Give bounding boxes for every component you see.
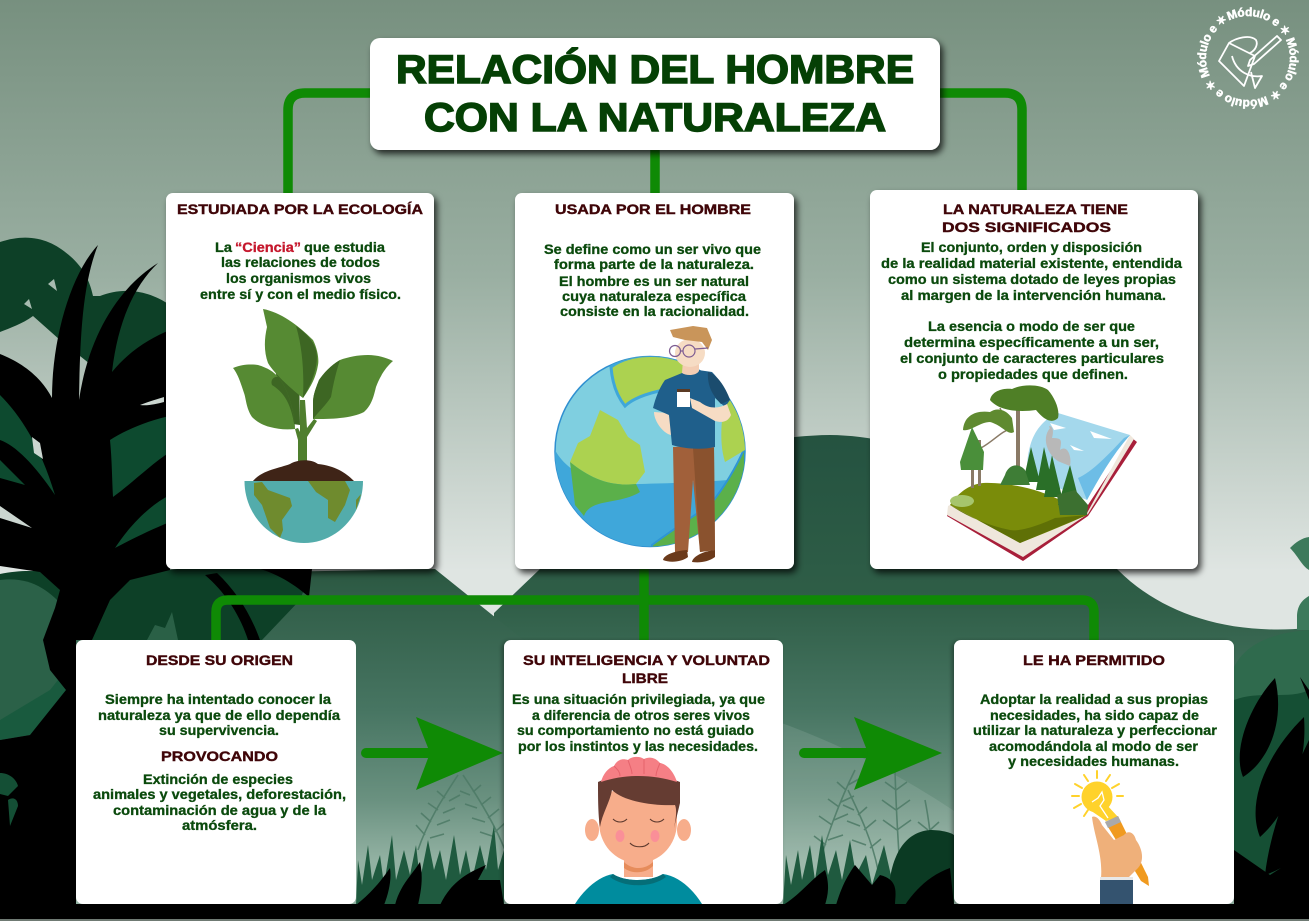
body text: Siempre ha intentado conocer la	[105, 692, 332, 707]
heading: LE HA PERMITIDO	[1023, 652, 1165, 668]
heading	[942, 201, 1128, 235]
icon: open book with forest	[947, 385, 1137, 561]
body text: acomodándola al modo de ser	[989, 739, 1199, 754]
title: CON LA NATURALEZA	[424, 96, 886, 140]
icon: earth globe	[554, 356, 746, 548]
icon: plant on half globe	[233, 309, 393, 543]
body text: necesidades, ha sido capaz de	[990, 708, 1199, 723]
body text: Se define como un ser vivo que	[544, 242, 761, 257]
heading: DOS SIGNIFICADOS	[942, 219, 1111, 235]
body text: “Ciencia”	[235, 240, 301, 255]
body text: su supervivencia.	[159, 723, 279, 738]
body text	[200, 240, 401, 302]
body text: el conjunto de caracteres particulares	[900, 351, 1164, 366]
logo: Módulo e: Módulo e ✶ Módulo e ✶ Módulo e ✶ Módulo e ✶	[1197, 7, 1299, 109]
panel: su inteligencia y voluntad libre	[504, 640, 783, 904]
body text: consequences: Extinción de especies	[143, 772, 293, 787]
heading: LIBRE	[622, 670, 668, 686]
title box	[370, 38, 940, 150]
body text: consequences	[93, 772, 346, 833]
body text: El hombre es un ser natural	[559, 274, 749, 289]
arrow: origen to inteligencia	[361, 717, 503, 790]
heading: DESDE SU ORIGEN	[146, 652, 293, 668]
title: RELACIÓN DEL HOMBRE	[396, 48, 914, 92]
subheading: provocando: PROVOCANDO	[161, 748, 278, 764]
connector: title to top cards	[288, 93, 1022, 194]
body text: entre sí y con el medio físico.	[200, 287, 401, 302]
panel: desde su origen	[76, 640, 356, 904]
body text: por los instintos y las necesidades.	[518, 739, 758, 754]
heading: ESTUDIADA POR LA ECOLOGÍA	[177, 201, 423, 217]
body text: consequences: atmósfera.	[182, 818, 257, 833]
body text	[973, 692, 1218, 769]
body text: y necesidades humanas.	[1008, 754, 1179, 769]
body text: forma parte de la naturaleza.	[554, 257, 754, 272]
body text	[881, 240, 1183, 382]
body text: a diferencia de otros seres vivos	[532, 708, 750, 723]
body text: determina específicamente a un ser,	[904, 335, 1159, 350]
background: reeds and grass	[356, 770, 954, 905]
body text: Es una situación privilegiada, ya que	[512, 692, 765, 707]
heading: LA NATURALEZA TIENE	[943, 201, 1128, 217]
body text: El conjunto, orden y disposición	[921, 240, 1142, 255]
body text: consiste en la racionalidad.	[560, 304, 749, 319]
icon: man with coffee	[653, 326, 731, 562]
body text	[512, 692, 765, 754]
body text: consequences: contaminación de agua y de la	[113, 803, 327, 818]
title	[396, 48, 914, 140]
heading: SU INTELIGENCIA Y VOLUNTAD	[523, 652, 770, 668]
background: right jungle silhouette and foreground	[0, 537, 1309, 921]
body text: naturaleza ya que de ello dependía	[98, 708, 341, 723]
panel: le ha permitido	[954, 640, 1234, 904]
icon: boy with brain	[575, 757, 702, 904]
panel: la naturaleza tiene dos significados	[870, 190, 1198, 569]
heading: USADA POR EL HOMBRE	[555, 201, 751, 217]
body text	[544, 242, 761, 319]
connector: top cards to bottom cards	[216, 569, 1094, 641]
panel: usada por el hombre	[515, 193, 794, 569]
body text: Adoptar la realidad a sus propias	[980, 692, 1208, 707]
panel: estudiada por la ecología	[166, 193, 434, 569]
body text: La esencia o modo de ser que	[928, 319, 1135, 334]
icon: hand with light bulb pencil	[1072, 771, 1149, 904]
body text: como un sistema dotado de leyes propias	[888, 272, 1176, 287]
body text: que estudia	[304, 240, 386, 255]
body text	[98, 692, 341, 738]
body text: su comportamiento no está guiado	[517, 723, 754, 738]
body text: los organismos vivos	[226, 271, 371, 286]
body text: o propiedades que definen.	[938, 367, 1128, 382]
body text: utilizar la naturaleza y perfeccionar	[973, 723, 1218, 738]
body text: consequences: animales y vegetales, deforestación,	[93, 787, 346, 802]
heading	[523, 652, 770, 686]
body text: de la realidad material existente, entendida	[881, 256, 1183, 271]
arrow: inteligencia to permitido	[799, 717, 942, 790]
body text: las relaciones de todos	[221, 255, 380, 270]
body text: cuya naturaleza específica	[562, 289, 747, 304]
body text: La	[215, 240, 233, 255]
background: left jungle silhouette	[0, 238, 312, 921]
body text: al margen de la intervención humana.	[901, 288, 1166, 303]
